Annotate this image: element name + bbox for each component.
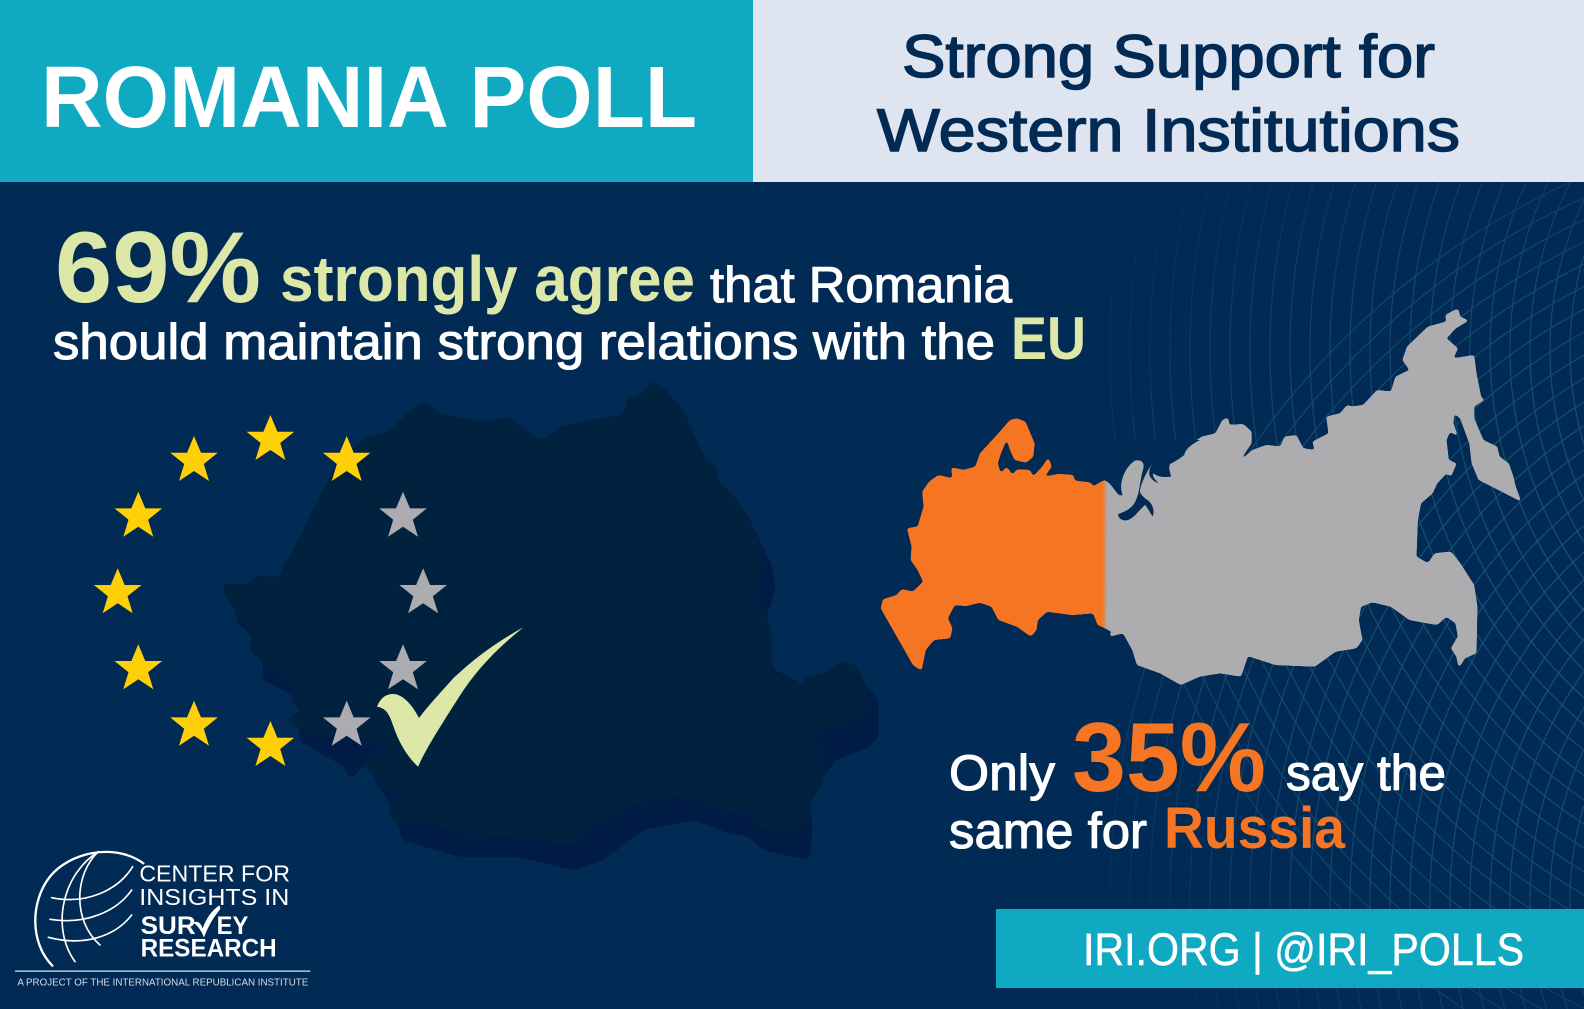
panel: subtitle banner (753, 0, 1584, 182)
region: western Russia orange (881, 418, 1105, 671)
icon: globe (35, 852, 143, 966)
callout: 35% Russia: 35% (1072, 702, 1266, 812)
headline: 69% strongly agree EU: should maintain strong relations with the (53, 314, 995, 370)
panel: title banner (0, 0, 753, 182)
title: ROMANIA POLL (41, 49, 697, 146)
icon: logo check (193, 905, 220, 937)
logo: Center for Insights in Survey Research: RESEARCH (141, 935, 277, 963)
headline: 69% strongly agree EU (53, 212, 1086, 372)
map: Russia split (881, 308, 1521, 685)
region: Gulf of Ob inlet (1105, 440, 1200, 520)
headline: 69% strongly agree EU: that Romania (710, 257, 1012, 313)
callout: 35% Russia: Only (949, 745, 1055, 801)
callout: 35% Russia: same for (949, 803, 1147, 859)
logo: Center for Insights in Survey Research: A PROJECT OF THE INTERNATIONAL REPUBLICAN INSTITUTE (17, 978, 309, 989)
callout: 35% Russia (949, 702, 1446, 861)
callout: 35% Russia: Russia (1164, 796, 1346, 861)
logo: Center for Insights in Survey Research: INSIGHTS IN (139, 884, 289, 910)
map: Romania silhouette (224, 381, 878, 870)
region: eastern Russia gray (1105, 308, 1521, 685)
logo: Center for Insights in Survey Research: CENTER FOR (139, 861, 290, 887)
EU star ring (94, 415, 447, 766)
subtitle (877, 23, 1460, 164)
logo: Center for Insights in Survey Research: SUR (141, 912, 196, 940)
website and handle: IRI.ORG | @IRI_POLLS (1083, 924, 1524, 975)
headline: 69% strongly agree EU: 69% (55, 212, 261, 324)
subtitle: Strong Support for (902, 23, 1435, 90)
headline: 69% strongly agree EU: strongly agree (280, 243, 695, 315)
callout: 35% Russia: say the (1286, 745, 1446, 801)
icon: check mark (377, 627, 524, 767)
logo: Center for Insights in Survey Research: EY (217, 912, 248, 940)
subtitle: Western Institutions (877, 97, 1460, 164)
panel: website bar (996, 909, 1584, 988)
headline: 69% strongly agree EU: EU (1011, 305, 1086, 372)
logo: Center for Insights in Survey Research (15, 852, 310, 989)
